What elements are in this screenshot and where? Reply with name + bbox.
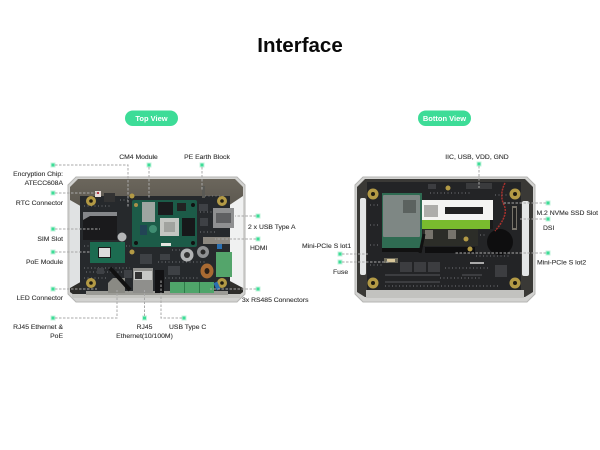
badge: bottom view: Botton View: [423, 114, 466, 123]
label: Encryption Chip: ATECC608A: [25, 180, 63, 187]
label: IIC, USB, VDD, GND: IIC, USB, VDD, GND: [445, 154, 509, 161]
label: 2 x USB Type A: [235, 214, 296, 231]
device photo: bottom view: [355, 177, 535, 302]
component: CM4 module: [132, 200, 197, 247]
label: Fuse: Fuse: [333, 269, 348, 276]
component: terminal block right: [216, 252, 232, 277]
component: fuse: [384, 258, 398, 263]
component: RTC connector: [95, 191, 115, 202]
component: red wires: [495, 183, 505, 231]
label: Mini-PCIe Slot 2: [455, 251, 586, 266]
component: USB Type C: [155, 270, 164, 293]
component: RJ45 Ethernet and PoE: [108, 268, 130, 293]
label: SIM Slot: [37, 227, 100, 243]
label: PoE Module: [26, 250, 90, 266]
component: side rails: [360, 198, 529, 298]
component: RJ45 Ethernet 10/100M: [133, 268, 153, 293]
device photo: top view: [68, 177, 245, 302]
label: Encryption Chip: [13, 163, 128, 207]
label: RJ45 Ethernet and PoE: [13, 290, 117, 340]
label: DSI: DSI: [543, 225, 554, 232]
component: Mini-PCIe slot 1 module: [382, 193, 422, 252]
label: M.2 NVMe SSD Slot: [503, 201, 598, 217]
texture: board components: [84, 196, 226, 278]
component: Mini-PCIe slot 2: [420, 234, 475, 253]
label: 3x RS485 Connectors: [210, 287, 309, 304]
component: DSI connector: [512, 206, 517, 230]
label: Fuse: [333, 260, 390, 276]
label: LED Connector: [17, 287, 97, 302]
label: RTC Connector: RTC Connector: [16, 200, 64, 207]
component: brass standoffs: [368, 186, 520, 288]
label: Mini-PCIe Slot 1: [302, 243, 368, 256]
badge: bottom view: [418, 110, 471, 126]
label: 3x RS485 Connectors: 3x RS485 Connectors: [242, 297, 309, 304]
texture: board components: [370, 193, 510, 286]
component: capacitors and inductor: [180, 246, 214, 278]
label: LED Connector: LED Connector: [17, 295, 64, 302]
component: battery: [487, 229, 513, 255]
badge: top view: [125, 110, 178, 126]
label: PE Earth Block: [184, 154, 230, 190]
label: Encryption Chip: Encryption Chip:: [13, 171, 63, 178]
label: Mini-PCIe Slot 2: Mini-PCIe S lot2: [537, 260, 586, 266]
component: HDMI: [203, 237, 230, 244]
label: Mini-PCIe Slot 1: Mini-PCIe S lot1: [302, 243, 351, 250]
badge: top view: Top View: [135, 114, 168, 123]
component: 3x RS485 connectors: [170, 282, 214, 293]
label: DSI: [520, 217, 554, 232]
label: RJ45 Ethernet 10/100M: Ethernet(10/100M): [116, 333, 173, 340]
label: PoE Module: PoE Module: [26, 259, 63, 266]
label: M.2 NVMe SSD Slot: M.2 NVMe SSD Slot: [536, 210, 598, 217]
component: IIC header: [466, 183, 492, 189]
label: USB Type C: USB Type C: [169, 324, 206, 331]
component: brass standoffs: [86, 194, 227, 288]
label: USB Type C: [161, 280, 206, 331]
label: SIM Slot: SIM Slot: [37, 236, 63, 243]
title: Interface: [257, 34, 343, 57]
label: CM4 Module: CM4 Module: [119, 154, 158, 161]
label: IIC, USB, VDD, GND: [445, 154, 509, 188]
label: RTC Connector: [16, 191, 97, 207]
component: M.2 NVMe SSD: [422, 200, 493, 246]
component: PoE module: [90, 242, 125, 263]
component: SIM slot: [83, 212, 126, 242]
component: 2 x USB Type A: [213, 208, 234, 228]
label: RJ45 Ethernet and PoE: RJ45 Ethernet &: [13, 324, 63, 331]
label: HDMI: HDMI: [250, 245, 267, 252]
label: CM4 Module: [119, 154, 158, 198]
label: PE Earth Block: PE Earth Block: [184, 154, 230, 161]
label: RJ45 Ethernet 10/100M: [116, 290, 173, 340]
label: 2 x USB Type A: 2 x USB Type A: [248, 224, 296, 231]
label: HDMI: [215, 237, 267, 252]
label: RJ45 Ethernet and PoE: PoE: [50, 333, 63, 340]
label: RJ45 Ethernet 10/100M: RJ45: [137, 324, 153, 331]
